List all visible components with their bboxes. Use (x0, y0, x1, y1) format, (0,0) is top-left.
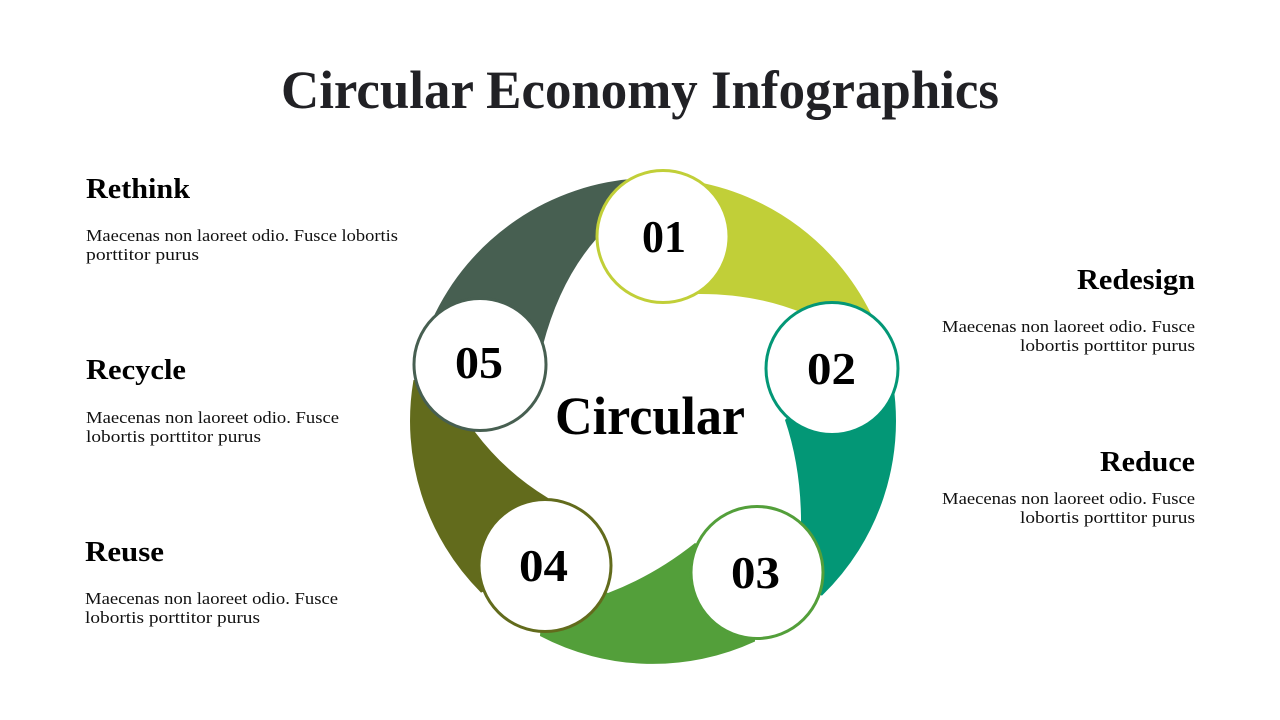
node 04 (479, 500, 611, 632)
node 02 (766, 302, 898, 434)
node 04: 04 (519, 541, 568, 591)
text block: Reuse: lobortis porttitor purus (85, 608, 260, 627)
segment 01: yellow-green arc (663, 181, 874, 369)
text block: Redesign: Maecenas non laoreet odio. Fusce (942, 317, 1195, 336)
text block: Reduce: lobortis porttitor purus (1020, 508, 1195, 527)
center label: Circular (555, 386, 745, 446)
text block: Reuse (85, 536, 338, 627)
text block: Redesign: lobortis porttitor purus (1020, 336, 1195, 355)
text block: Recycle (86, 354, 339, 446)
text block: Reduce: Reduce (1100, 446, 1195, 478)
text block: Recycle: lobortis porttitor purus (86, 427, 261, 446)
text block: Rethink: Rethink (86, 173, 191, 205)
text block: Redesign (942, 264, 1195, 355)
node 03 (691, 506, 823, 638)
segment 04: olive arc (410, 365, 548, 593)
title: Circular Economy Infographics (281, 60, 999, 120)
segment 03: green arc (540, 543, 757, 664)
text block: Recycle: Recycle (86, 354, 186, 386)
circular diagram (410, 170, 898, 664)
text block: Rethink (86, 173, 398, 264)
text block: Reduce: Maecenas non laoreet odio. Fusce (942, 489, 1195, 508)
text block: Recycle: Maecenas non laoreet odio. Fusce (86, 408, 339, 427)
text block: Reuse: Reuse (85, 536, 164, 568)
node 03: 03 (731, 548, 780, 598)
text block: Reuse: Maecenas non laoreet odio. Fusce (85, 589, 338, 608)
text block: Reduce (942, 446, 1195, 527)
text block: Rethink: porttitor purus (86, 245, 199, 264)
segment 02: teal arc (757, 369, 896, 596)
text block: Redesign: Redesign (1077, 264, 1195, 296)
node 02: 02 (807, 344, 856, 394)
segment 05: dark green arc (432, 178, 663, 365)
node 05 (414, 298, 546, 430)
node 01: 01 (642, 212, 686, 262)
text block: Rethink: Maecenas non laoreet odio. Fusce lobortis (86, 226, 398, 245)
node 01 (597, 170, 729, 302)
node 05: 05 (455, 338, 503, 388)
